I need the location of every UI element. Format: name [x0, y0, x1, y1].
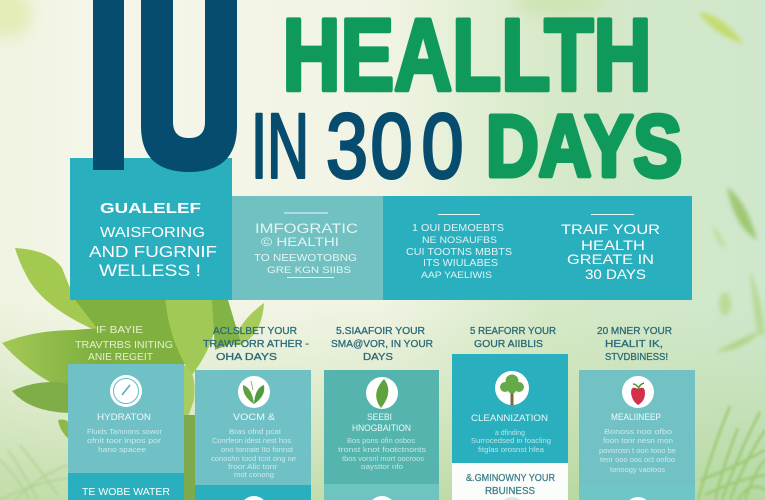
card text: foon tonr nesn mon: [603, 436, 673, 445]
panel: train your health: [533, 196, 692, 300]
heading: column 5: STVDBINESS!: [605, 351, 668, 363]
icon: lower circle: [240, 496, 268, 500]
card text: oaysttor nfo: [361, 462, 403, 471]
heading: column 5: 20 MNER YOUR: [597, 325, 672, 337]
title: in: IN: [251, 96, 309, 198]
grass bottom left: [0, 445, 68, 500]
card title: SEEBI: [367, 412, 392, 423]
panel: benefits: [383, 196, 533, 300]
card text: tbos vorsnl mort oocroos: [342, 454, 424, 463]
band label: TE WOBE WATER: [82, 486, 170, 498]
card text: ofnit toor inpos por: [87, 436, 162, 445]
card title: VOCM &: [233, 412, 276, 423]
text block: GREATE IN: [567, 251, 654, 267]
title: 300: 0: [422, 96, 464, 198]
heading: column 4: [470, 325, 556, 350]
heading: column 3: [331, 325, 433, 363]
text block: AAP YAELIWIS: [421, 270, 492, 281]
band heading: &.GMINOWNY YOUR: [466, 472, 555, 484]
text block: WELLESS !: [99, 261, 201, 280]
card text: [87, 427, 162, 454]
heading: column 5: [597, 325, 672, 363]
panel: stress card: [324, 370, 439, 500]
card text: Bos pons ofin osbos: [347, 436, 415, 445]
text block: ITS WIULABES: [423, 258, 498, 269]
title: [93, 0, 682, 198]
card title: HNOGBAITION: [352, 423, 411, 434]
panel: healthy eating card: [579, 370, 695, 500]
heading: column 1: TRAVTRBS INITING: [75, 339, 173, 351]
icon: lower circle: [368, 496, 396, 500]
icon: leaf: [366, 377, 398, 409]
card text: [211, 427, 296, 479]
text block: TO NEEWOTOBNG: [254, 253, 357, 264]
card text: Bonoss noo ofbo: [604, 427, 672, 436]
card text: ono tonrate Ito fonnst: [221, 445, 294, 454]
heading: column 3: SMA@VOR, IN YOUR: [331, 338, 433, 350]
card text: tenr ooo oos oct onfoo: [600, 455, 675, 464]
icon: lower circle: [625, 497, 651, 500]
band heading: RBUINESS: [485, 485, 535, 497]
decorative blurred leaves right: [698, 12, 765, 352]
icon: tree: [495, 371, 529, 405]
text block: [254, 221, 358, 276]
panel: cleanization card: [452, 354, 568, 500]
panel: hydration card: [68, 364, 184, 500]
text block: GRE KGN SIIBS: [267, 265, 351, 276]
card text: [338, 436, 426, 471]
panel: infographic: [232, 196, 383, 300]
title: 300: 0: [370, 96, 412, 198]
text block: NE NOSAUFBS: [422, 235, 497, 246]
card text: fitglas orosnst hfea: [478, 445, 545, 454]
text block: 1 OUI DEMOEBTS: [412, 223, 504, 234]
band heading: [466, 472, 555, 497]
card text: [599, 427, 676, 474]
heading: column 1: ANIE REGEIT: [88, 351, 154, 363]
heading: column 5: HEALIT IK,: [605, 338, 663, 350]
icon: apple: [622, 376, 654, 408]
icon: sprout: [238, 376, 270, 408]
card text: Surrocedsed in foacling: [471, 436, 551, 445]
card text: tonoogy vaotoos: [610, 465, 665, 474]
text block: 30 DAYS: [585, 267, 646, 282]
card text: povorosn t oon tooo be: [599, 446, 676, 455]
text block: HEALTH: [581, 237, 645, 253]
heading: column 2: ACLSLBET YOUR: [213, 325, 297, 337]
title: 300: [326, 96, 464, 198]
text block: [406, 223, 512, 281]
card text: tronst knot footctnonts: [338, 445, 426, 454]
card title: MEALIINEEP: [611, 412, 661, 423]
panel: wellness intro: [70, 158, 232, 300]
text block: AND FUGRNIF: [89, 244, 217, 261]
title: 300: 3: [326, 96, 368, 198]
heading: column 4: 5 REAFORR YOUR: [470, 325, 556, 337]
card title: HYDRATON: [97, 412, 151, 423]
heading: column 1: [75, 324, 173, 363]
panel: focus card: [195, 370, 311, 500]
card title: CLEANNIZATION: [471, 413, 548, 424]
heading: column 3: DAYS: [363, 351, 393, 363]
title: big numeral: [93, 0, 237, 172]
heading: column 2: TRAWFORR ATHER -: [203, 338, 310, 350]
heading: GUALELEF: [100, 200, 201, 217]
heading: column 3: 5.SIAAFOIR YOUR: [336, 325, 425, 337]
card text: conoshn tocd tcnt ong ne: [211, 454, 296, 463]
heading: column 2: [203, 325, 310, 363]
card text: [471, 428, 551, 454]
icon: lower circle: [499, 497, 525, 500]
heading: column 4: GOUR AIIBLIS: [474, 338, 543, 350]
text block: IMFOGRATIC: [255, 221, 358, 236]
icon: plant behind the panels: [2, 248, 264, 500]
grass bottom right: [698, 406, 765, 500]
card text: Fluids Tamnons sowor: [87, 427, 162, 436]
card text: Bras ofnd pcat: [229, 427, 282, 436]
card title: [352, 412, 411, 434]
card text: Conrfeon idest nest hos: [212, 436, 291, 445]
card text: froor Alic tonr: [228, 462, 278, 471]
title: days: DAYS: [486, 98, 682, 195]
card text: mot conong: [234, 470, 274, 479]
text block: [561, 221, 660, 282]
title: health: HEALLTH: [282, 0, 652, 112]
text block: © HEALTHI: [261, 237, 339, 249]
text block: TRAIF YOUR: [561, 221, 660, 237]
icon: water gauge: [110, 375, 142, 407]
text block: CUI TOOTNS MBBTS: [406, 247, 512, 258]
text block: WAISFORING: [100, 224, 205, 241]
heading: column 2: OHA DAYS: [216, 351, 277, 363]
heading: column 1: IF BAYIE: [96, 324, 143, 336]
card text: hano spacee: [98, 445, 146, 454]
text block: [89, 224, 217, 280]
card text: a dfinding: [495, 428, 525, 437]
